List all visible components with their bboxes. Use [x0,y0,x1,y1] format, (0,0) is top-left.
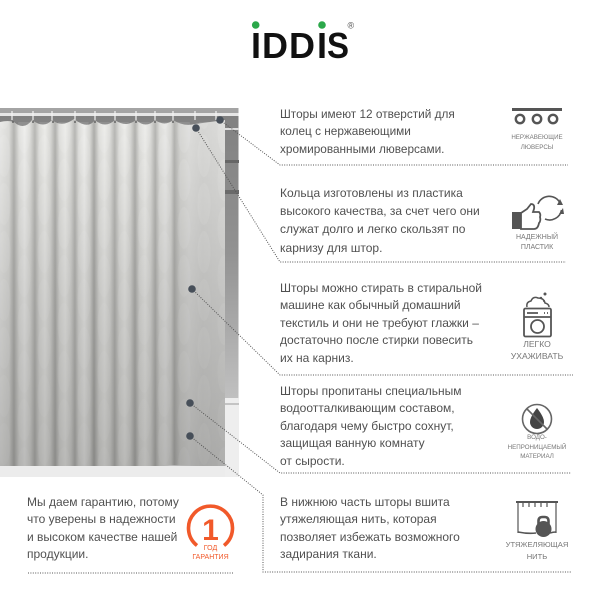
logo: IDDIS: D [262,25,288,66]
text: weighted thread [280,495,460,561]
text: plastic rings: Кольца изготовлены из пластика [280,186,463,200]
guarantee badge [188,506,233,561]
text: water repellent: благодаря чему быстро сохнут, [280,419,454,433]
guarantee badge: ГОД [204,545,217,552]
text: washing: их на карниз. [280,351,354,365]
text: guarantee: и высоком качестве нашей [27,530,177,544]
text: weighted thread: задирания ткани. [280,547,377,561]
label: grommets: ЛЮВЕРСЫ [521,144,553,151]
label: weighted thread [506,540,568,560]
text: guarantee: продукции. [27,547,88,561]
logo: IDDIS: D [289,25,315,66]
label: waterproof: НЕПРОНИЦАЕМЫЙ [508,444,566,451]
text: grommets: хромированными люверсами. [280,142,444,156]
label: waterproof [508,434,566,460]
text: water repellent: Шторы пропитаны специальным [280,384,462,398]
logo: IDDIS: S [327,25,349,66]
callout markers [186,116,224,440]
text: weighted thread: позволяет избежать возможного [280,530,460,544]
label: waterproof: ВОДО- [527,434,547,441]
label: plastic [516,232,558,250]
text: water repellent: водоотталкивающим составом, [280,401,455,415]
label: easy care [511,339,563,361]
label: weighted thread: НИТЬ [527,552,547,560]
text: guarantee: Мы даем гарантию, потому [27,495,179,509]
callout leader lines [28,120,573,573]
text: grommets: колец с нержавеющими [280,124,411,138]
text: washing: Шторы можно стирать в стиральной [280,281,482,295]
text: plastic rings: карнизу для штор. [280,241,382,255]
icon: thumbs up with cycle arrows [512,196,564,229]
text: washing [280,281,482,365]
text: washing: достаточно после стирки повесить [280,333,473,347]
text: water repellent: от сырости. [280,454,345,468]
label: plastic: ПЛАСТИК [521,244,553,250]
icon: curtain with kettlebell [516,501,558,537]
label: easy care: ЛЕГКО [523,339,551,349]
label: easy care: УХАЖИВАТЬ [511,351,563,361]
logo: IDDIS: I [251,25,261,66]
icon: grommets [512,108,562,123]
text: grommets: Шторы имеют 12 отверстий для [280,107,455,121]
logo: IDDIS: ® [348,20,354,30]
label: grommets [511,134,563,151]
text: plastic rings: служат долго и легко скользят по [280,222,465,236]
text: weighted thread: В нижнюю часть шторы вшита [280,495,450,509]
logo: IDDIS: I [317,25,327,66]
label: grommets: НЕРЖАВЕЮЩИЕ [511,134,563,141]
guarantee badge: 1 [202,514,219,547]
text: plastic rings [280,186,480,255]
text: plastic rings: высокого качества, за счет чего они [280,204,480,218]
label: weighted thread: УТЯЖЕЛЯЮЩАЯ [506,540,568,549]
text: water repellent [280,384,462,468]
text: water repellent: защищая ванную комнату [280,436,425,450]
logo: IDDIS [251,20,354,66]
text: grommets [280,107,455,156]
icon: washing machine [524,292,551,336]
label: waterproof: МАТЕРИАЛ [520,453,554,460]
text: weighted thread: утяжеляющая нить, которая [280,512,437,526]
label: plastic: НАДЕЖНЫЙ [516,234,558,241]
text: guarantee: что уверены в надежности [27,512,176,526]
text: guarantee [27,495,179,561]
photo: shower curtain on rod [0,108,239,477]
text: washing: текстиль и они не требуют глажки – [280,316,479,330]
text: washing: машине как обычный домашний [280,298,461,312]
icon: crossed water drop [522,404,552,434]
guarantee badge: ГАРАНТИЯ [192,554,229,561]
